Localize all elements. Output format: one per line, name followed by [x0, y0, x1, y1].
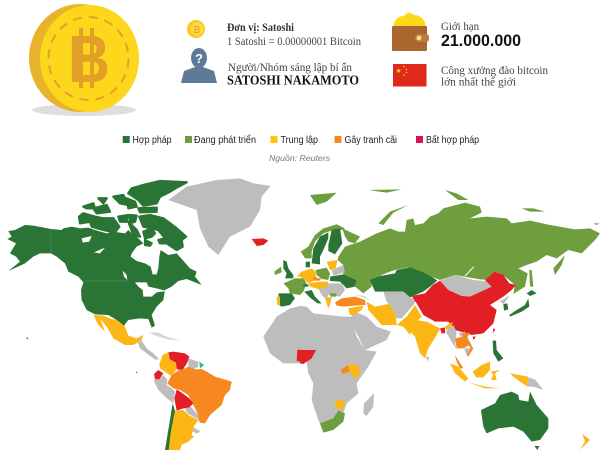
world map: [7, 178, 600, 450]
Colombia: [159, 352, 177, 376]
Iran and Pakistan: [334, 302, 422, 410]
icon: small satoshi coin: B: [194, 25, 201, 36]
legend: Trung lập: [280, 135, 318, 146]
map: Greenland, Iceland, Mexico and West Africa: [26, 178, 300, 363]
Lakes: [82, 236, 167, 297]
Nigeria: [300, 350, 316, 364]
text: founder: [227, 61, 359, 88]
legend: [123, 134, 479, 146]
map: Asia: [370, 255, 565, 335]
Contested South East Asia: [455, 333, 473, 368]
Canadian Arctic islands: [79, 181, 187, 250]
icon: large bitcoin coin: [29, 4, 139, 116]
Gray South East Asia: [426, 325, 543, 390]
text: supply limit: [441, 21, 521, 50]
Mongolia, Central Asia, North Korea: [383, 275, 510, 318]
Chile: [165, 403, 175, 450]
icon: China flag: ★: [396, 67, 402, 75]
Legal Europe: [278, 228, 357, 307]
USA and Canada mainland: [7, 225, 202, 328]
legend: Gây tranh cãi: [344, 135, 397, 146]
West Africa: [263, 306, 300, 363]
China: [412, 272, 516, 335]
South Africa: [320, 411, 345, 433]
Neutral Europe: [277, 260, 363, 315]
Mexico: [93, 315, 143, 345]
Sakhalin and Kamchatka side: [529, 255, 565, 287]
text: largest mining hub: Công xưởng đào bitcoin: [441, 65, 548, 77]
Philippines, Australia and Tasmania: [481, 341, 548, 450]
India and neutral South East Asia: [407, 320, 590, 450]
text: unit: [227, 22, 361, 48]
text: supply limit: 21.000.000: [441, 31, 521, 50]
icon: large bitcoin coin: B: [68, 22, 110, 97]
Brazil: [167, 367, 232, 423]
map: South and Southeast Asia and Oceania: [407, 320, 590, 450]
legend: Đang phát triển: [194, 134, 256, 146]
text: supply limit: Giới hạn: [441, 21, 479, 33]
Africa and Arabia: [300, 306, 391, 432]
icon: wallet with coins: [392, 13, 429, 51]
Uganda: [341, 365, 349, 374]
icon: China flag: [393, 64, 426, 86]
Central America, Caribbean, Guyana, Peru, Paraguay, Uruguay: [137, 332, 201, 433]
legend: Hợp pháp: [132, 135, 172, 146]
text: unit: Đơn vị: Satoshi: [227, 22, 295, 34]
Taiwan: [493, 328, 495, 333]
French Guiana: [199, 362, 204, 368]
Russia and north territories: [310, 189, 600, 294]
icon: anonymous person: ?: [195, 51, 203, 66]
source note: Nguồn: Reuters: [269, 153, 331, 163]
Iceland: [252, 238, 268, 246]
icon: anonymous person: [181, 48, 217, 83]
Bulgaria: [330, 293, 337, 297]
Czech Republic and Turkey: [313, 277, 366, 307]
Venezuela, Ecuador: [136, 352, 189, 379]
Bolivia: [174, 389, 193, 411]
Light green Europe: [274, 224, 345, 295]
text: founder: SATOSHI NAKAMOTO: [227, 74, 359, 88]
Gray Europe: [318, 265, 372, 302]
text: founder: Người/Nhóm sáng lập bí ẩn: [228, 61, 352, 74]
map: South America: [136, 332, 232, 450]
Greenland: [168, 178, 271, 255]
map: North America: [7, 181, 202, 328]
text: largest mining hub: [441, 65, 548, 88]
legend: Bất hợp pháp: [426, 134, 479, 146]
Kazakhstan, Korea and Japan: [370, 267, 537, 317]
icon: small satoshi coin: [187, 20, 205, 38]
Nigeria west part: [297, 349, 300, 362]
map: Africa, Middle East and Russia: [300, 189, 600, 433]
text: largest mining hub: lớn nhất thế giới: [441, 76, 516, 88]
Bangladesh and Hainan: [440, 327, 476, 340]
text: unit: 1 Satoshi = 0.00000001 Bitcoin: [227, 36, 361, 48]
map: Europe: [274, 224, 372, 315]
Argentina: [168, 410, 198, 450]
